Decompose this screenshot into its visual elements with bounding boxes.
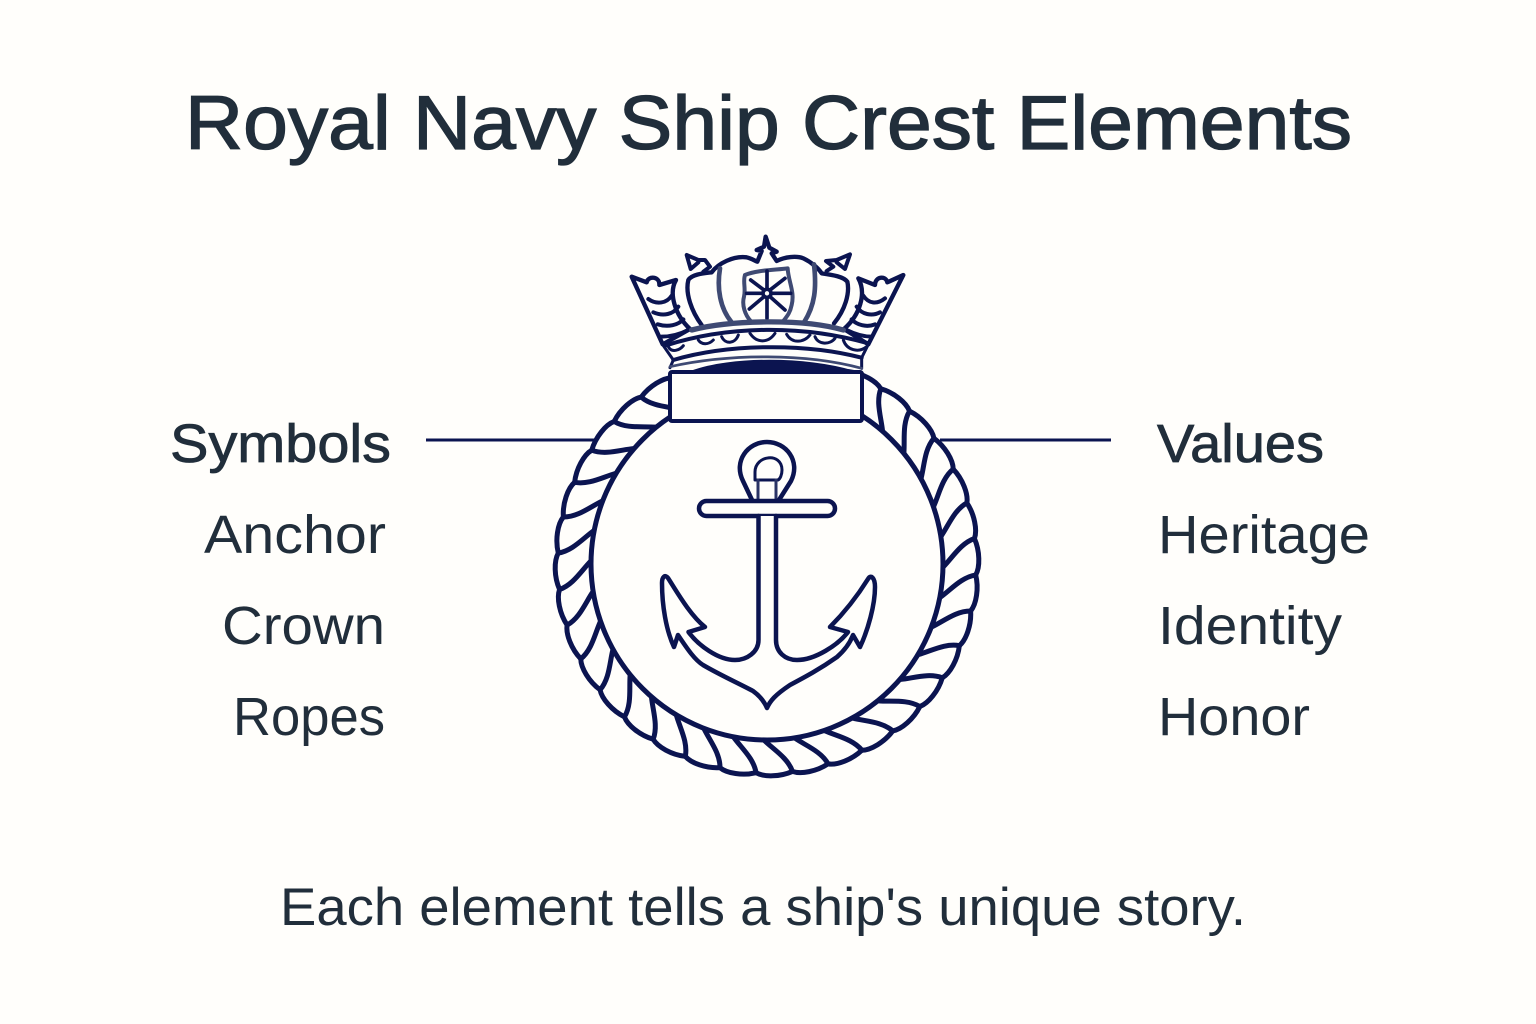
right sail stripes (847, 296, 885, 337)
name plaque (670, 372, 862, 421)
crown arches (687, 237, 848, 325)
inner arches (719, 264, 815, 322)
left sail (632, 277, 690, 344)
crown side closures (663, 344, 868, 368)
crown base rim (670, 357, 862, 368)
right sail (844, 275, 903, 344)
label: crown: Crown (222, 596, 385, 656)
left sail stripes (648, 296, 688, 337)
title: Royal Navy Ship Crest Elements (185, 81, 1352, 166)
anchor ring eye (755, 458, 782, 480)
crown band rim (665, 330, 868, 346)
text block: values list (1157, 414, 1370, 747)
wheel spokes (747, 271, 791, 318)
connector line: values (940, 438, 1111, 442)
naval crown (632, 237, 903, 371)
anchor shaft top (758, 480, 776, 502)
connector line: symbols (426, 438, 598, 442)
label: ropes: Ropes (233, 687, 385, 747)
label: honor: Honor (1158, 687, 1310, 747)
label: identity: Identity (1158, 596, 1342, 656)
anchor ring (740, 442, 794, 500)
wheel panel (743, 268, 793, 321)
wheel hub (763, 289, 771, 297)
anchor (662, 442, 875, 708)
crown small crosses (687, 255, 710, 272)
label: heritage: Heritage (1158, 505, 1370, 565)
heading: values: Values (1157, 414, 1324, 474)
text block: symbols list (170, 414, 391, 747)
rope ring (553, 365, 981, 778)
anchor crossbar (699, 501, 835, 516)
crown lower rim (673, 347, 862, 360)
heading: symbols: Symbols (170, 414, 391, 474)
crown band (692, 322, 843, 330)
crest (553, 237, 981, 778)
footer caption: Each element tells a ship's unique story. (280, 878, 1246, 937)
crown shadow (692, 360, 853, 371)
anchor body (662, 516, 875, 708)
wheel (747, 271, 791, 318)
crown backing (632, 238, 903, 368)
crown band swags (668, 333, 867, 350)
label: anchor: Anchor (204, 505, 386, 565)
